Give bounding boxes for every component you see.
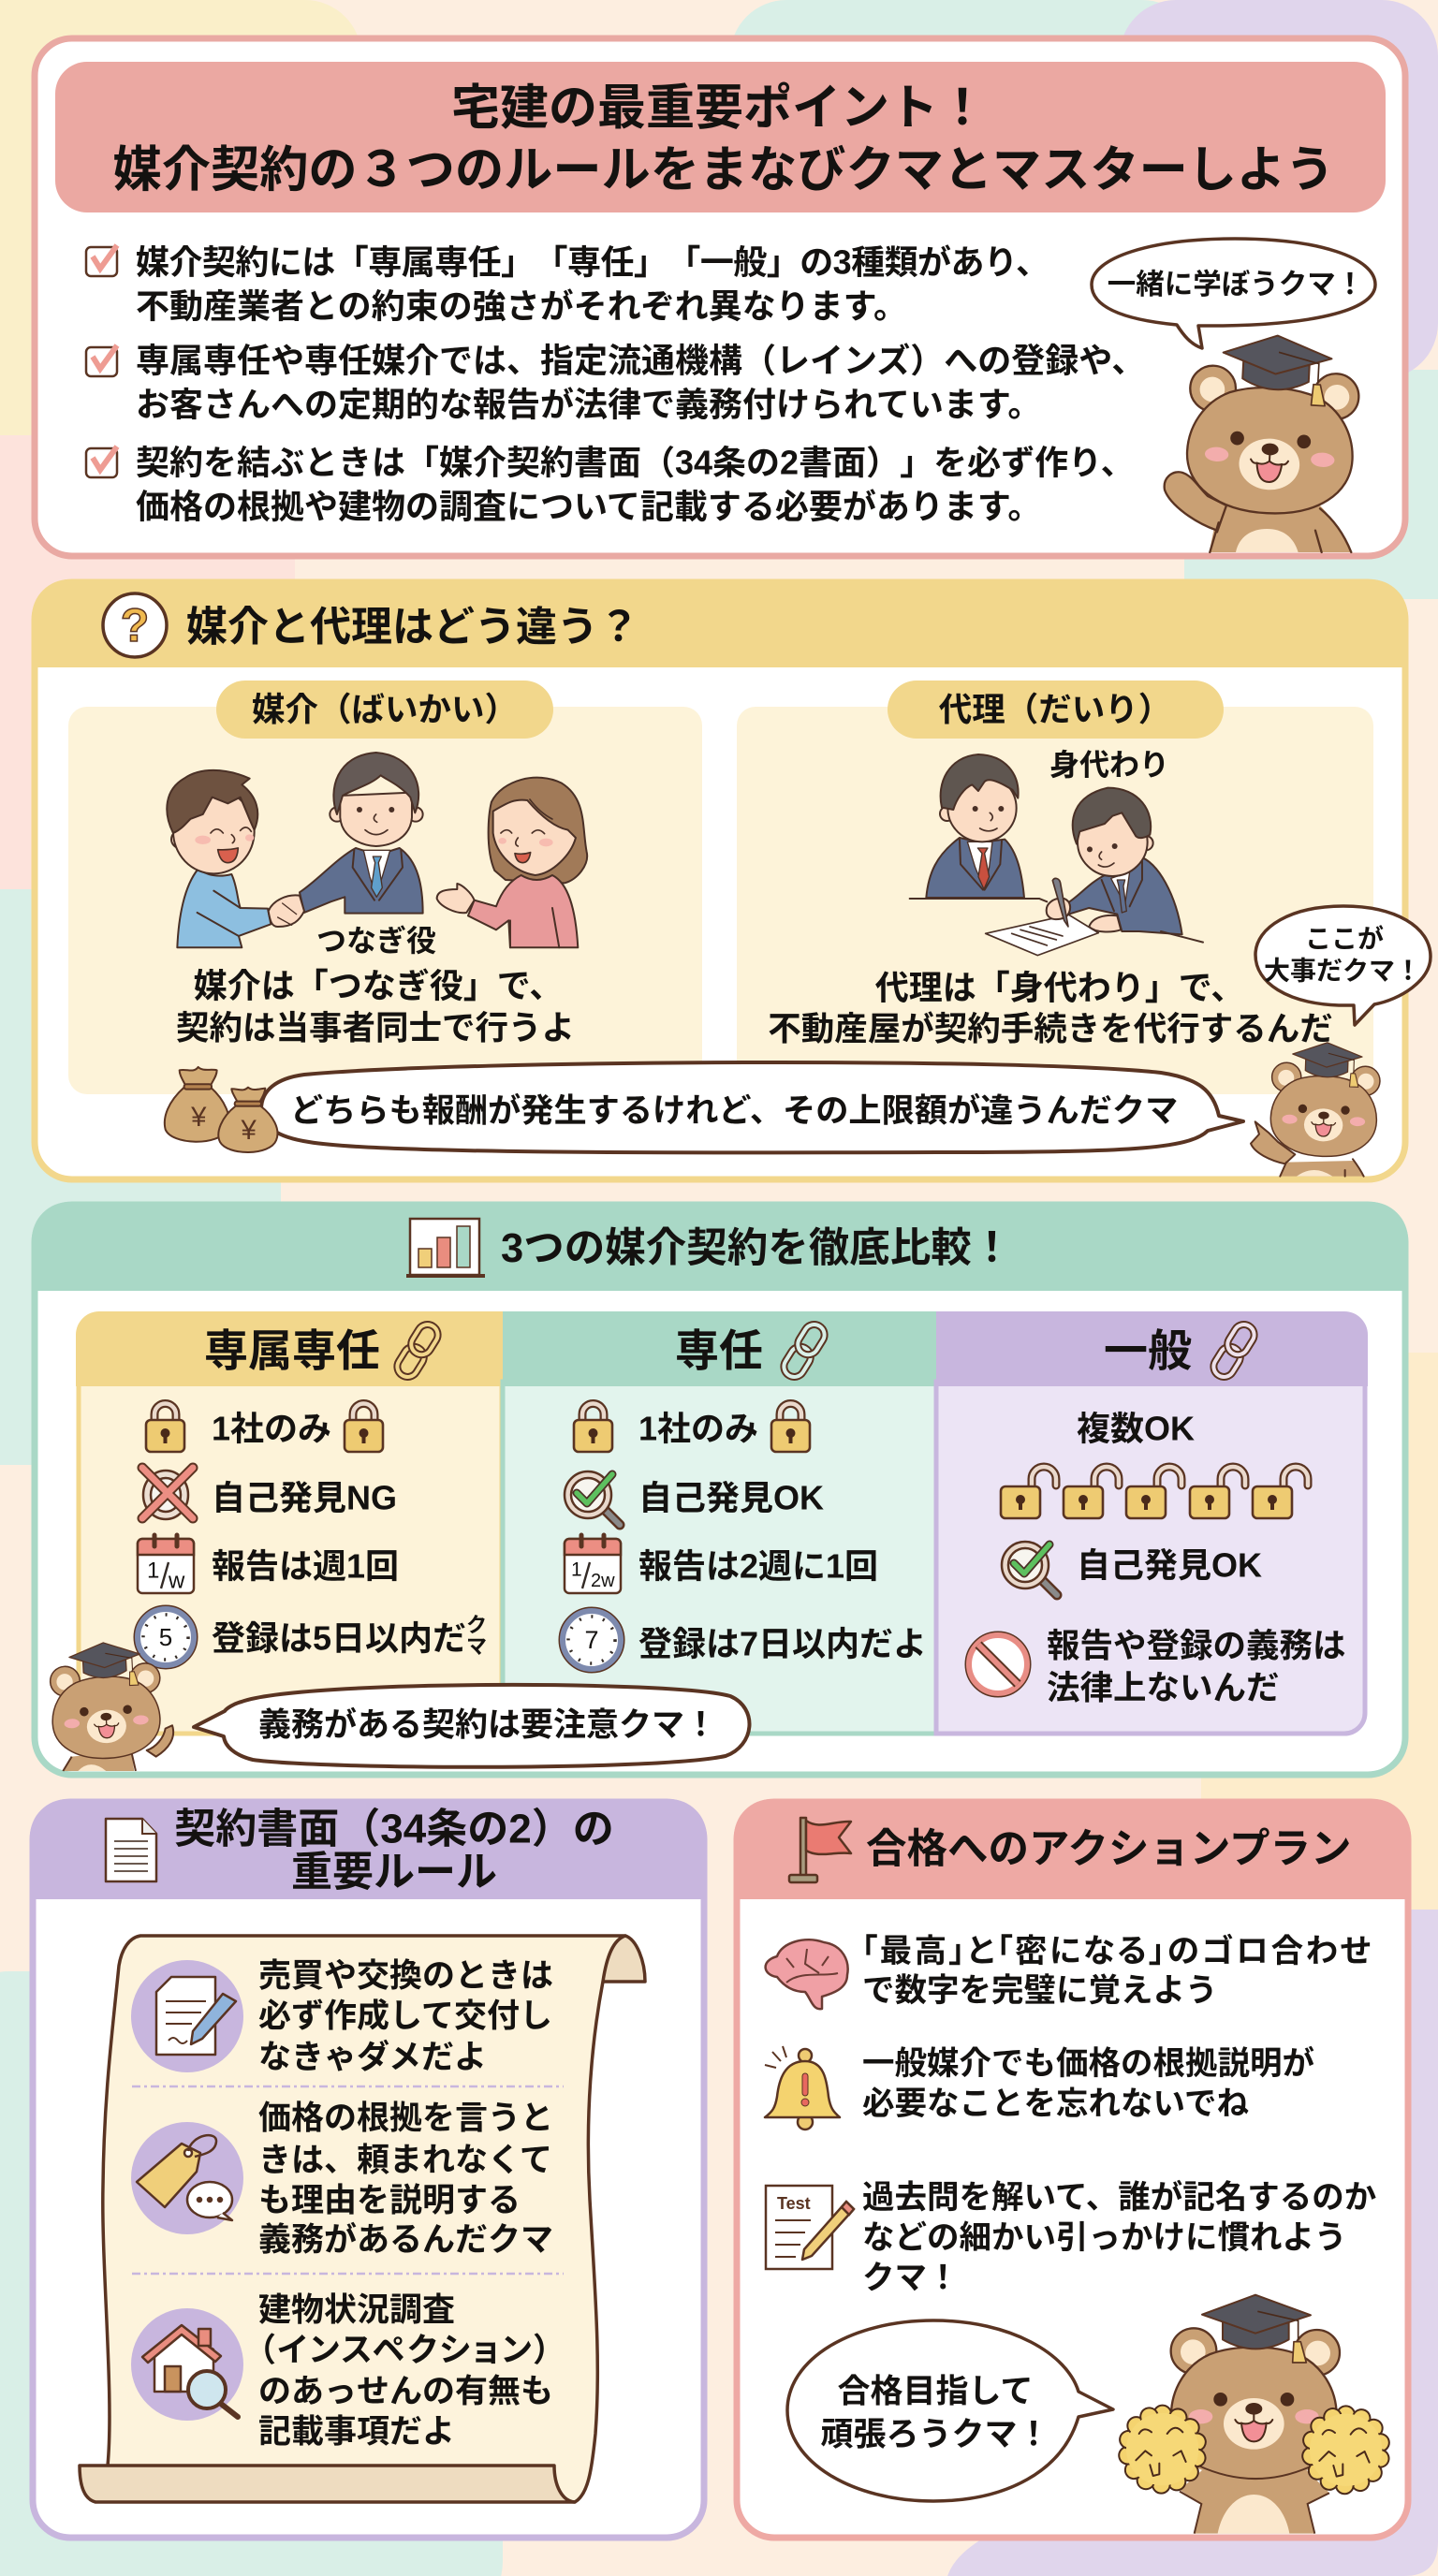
icon: money bags: ¥ [190, 1102, 207, 1133]
column: exclusive-exclusive: 専属専任 [204, 1325, 380, 1376]
panel header [734, 1799, 1411, 1899]
rule 3: 記載事項だよ [258, 2413, 455, 2451]
action 2: 必要なことを忘れないでね [862, 2086, 1249, 2122]
row: no obligation: 法律上ないんだ [1047, 1669, 1280, 1706]
row: register within 7 days [563, 1611, 927, 1669]
icon: chain [780, 1321, 829, 1381]
rule 2 [131, 2100, 553, 2258]
panel: action plan [734, 1799, 1411, 2538]
pill: agency [888, 681, 1224, 739]
action 2: 一般媒介でも価格の根拠説明が [862, 2045, 1314, 2082]
action 3: 過去問を解いて、誰が記名するのか [862, 2179, 1376, 2216]
bullet 1 [86, 243, 1049, 326]
bullet 1: 不動産業者との約束の強さがそれぞれ異なります。 [136, 286, 907, 326]
icon: chain [393, 1321, 442, 1381]
speech bubble: aim to pass: 合格目指して [838, 2374, 1033, 2409]
row: register within 5 days [138, 1609, 487, 1665]
bullet 1: 媒介契約には「専属専任」「専任」「一般」の3種類があり、 [136, 243, 1049, 281]
column: exclusive-exclusive [76, 1311, 503, 1734]
speech bubble: reward limits: どちらも報酬が発生するけれど、その上限額が違うんだクマ [290, 1093, 1178, 1129]
action 2 [765, 2045, 1314, 2130]
icon: document and pen [156, 1977, 236, 2055]
row: weekly report: 1 [147, 1558, 159, 1584]
panel: summary [35, 38, 1405, 556]
row: one company only: 1社のみ [212, 1410, 331, 1447]
row: self discovery OK [1002, 1542, 1262, 1595]
illustration: parchment scroll [80, 1936, 645, 2502]
icon: question mark [103, 593, 167, 657]
icon: brain [766, 1939, 848, 2009]
panel: contract document rules [30, 1799, 707, 2538]
column: exclusive: 専任 [675, 1325, 763, 1376]
rule 3: 建物状況調査 [258, 2291, 455, 2329]
row: register within 5 days: 登録は5日以内だ [212, 1619, 466, 1657]
text: multiple OK: 複数OK [1077, 1410, 1195, 1447]
row: one company only: 1社のみ [638, 1410, 758, 1447]
action 1: で数字を完璧に覚えよう [862, 1973, 1217, 2009]
pill: brokerage [216, 681, 553, 739]
title banner: 宅建の最重要ポイント！ [451, 81, 987, 136]
text: brokerage explanation [176, 966, 575, 1046]
text: brokerage explanation: 媒介は「つなぎ役」で、 [194, 966, 563, 1005]
action 1: 「最高」と「密になる」のゴロ合わせ [861, 1933, 1371, 1969]
action 3: などの細かい引っかけに慣れよう [862, 2220, 1346, 2256]
speech bubble: aim to pass [787, 2320, 1113, 2501]
speech bubble: this is important: 大事だクマ！ [1264, 957, 1421, 985]
speech bubble: be careful: 義務がある契約は要注意クマ！ [258, 1707, 717, 1743]
row: one company only [146, 1404, 383, 1452]
row: weekly report: 報告は週1回 [212, 1546, 399, 1586]
panel: comparison of the three contracts [32, 1202, 1408, 1775]
label: stand-in: 身代わり [1049, 748, 1169, 782]
row: register within 5 days: 5 [159, 1623, 172, 1651]
row: no obligation: 報告や登録の義務は [1047, 1627, 1346, 1664]
speech bubble: be careful [194, 1685, 749, 1767]
bullet 3: 契約を結ぶときは「媒介契約書面（34条の2書面）」を必ず作り、 [136, 444, 1135, 481]
row: report every two weeks [565, 1535, 878, 1593]
text: agency explanation: 不動産屋が契約手続きを代行するんだ [768, 1010, 1333, 1047]
row: self discovery NG: 自己発見NG [212, 1479, 397, 1516]
rule 1: 必ず作成して交付し [258, 1998, 552, 2035]
rule 2: 義務があるんだクマ [258, 2222, 553, 2258]
rule 3 [131, 2291, 553, 2451]
speech bubble: study together: 一緒に学ぼうクマ！ [1108, 269, 1364, 300]
bullet 3 [86, 444, 1135, 526]
row: report every two weeks: 報告は2週に1回 [638, 1546, 878, 1586]
rule 3: のあっせんの有無も [258, 2374, 553, 2409]
speech bubble: study together [1092, 239, 1375, 348]
title banner [55, 62, 1386, 212]
action 3 [766, 2179, 1376, 2296]
action 3: クマ！ [862, 2261, 959, 2296]
bullet 2: お客さんへの定期的な報告が法律で義務付けられています。 [136, 386, 1041, 423]
bear: waving with graduation cap [1165, 331, 1362, 552]
pill: brokerage: 媒介（ばいかい） [252, 691, 518, 728]
bear: cheering with pompoms [1118, 2295, 1391, 2534]
icon: price tag and speech [137, 2135, 232, 2220]
row: register within 7 days: 7 [584, 1626, 599, 1654]
action 1 [766, 1933, 1371, 2009]
rule 2: きは、頼まれなくて [258, 2142, 552, 2179]
text: agency explanation [768, 968, 1333, 1047]
rule 3: （インスペクション） [258, 2333, 550, 2368]
icon: chain [1210, 1321, 1258, 1381]
panel header: 重要ルール [291, 1850, 497, 1895]
row: self discovery OK: 自己発見OK [1077, 1546, 1262, 1584]
row: report every two weeks: 2w [591, 1571, 615, 1591]
panel header: 媒介と代理はどう違う？ [186, 605, 639, 650]
bear: small pointing [49, 1640, 173, 1771]
row: weekly report [138, 1535, 399, 1593]
row: report every two weeks: 1 [571, 1559, 582, 1580]
row: self discovery OK: 自己発見OK [638, 1479, 824, 1516]
rule 1 [131, 1958, 553, 2076]
panel header [32, 579, 1408, 667]
bullet 2 [86, 341, 1145, 423]
illustration: three people shaking hands [167, 753, 587, 947]
panel header: 契約書面（34条の2）の [174, 1807, 614, 1852]
pill: agency: 代理（だいり） [939, 691, 1171, 728]
icon: document [106, 1819, 156, 1881]
speech bubble: this is important [1255, 906, 1431, 1025]
panel header [32, 1202, 1408, 1291]
row: weekly report: w [168, 1569, 185, 1593]
sub-panel: brokerage [68, 681, 702, 1094]
panel header [30, 1799, 707, 1899]
row: self discovery OK [565, 1471, 824, 1525]
icon: house and magnifier [142, 2325, 238, 2417]
column: general: 一般 [1104, 1325, 1192, 1376]
title banner: 媒介契約の３つのルールをまなびクマとマスターしよう [113, 143, 1334, 198]
row: register within 7 days: 登録は7日以内だよ [638, 1625, 927, 1662]
row: register within 5 days: ク [466, 1614, 487, 1636]
icon: five open locks [1001, 1467, 1308, 1518]
row: self discovery NG [142, 1468, 397, 1519]
text: brokerage explanation: 契約は当事者同士で行うよ [176, 1009, 575, 1046]
icon: alert bell [765, 2046, 840, 2130]
row: register within 5 days: マ [466, 1634, 487, 1659]
panel header: 合格へのアクションプラン [866, 1827, 1352, 1872]
text: agency explanation: 代理は「身代わり」で、 [875, 968, 1244, 1007]
icon: test sheet and pencil: Test [777, 2194, 811, 2213]
rule 2: 価格の根拠を言うと [258, 2100, 553, 2136]
panel header: 3つの媒介契約を徹底比較！ [501, 1226, 1012, 1271]
icon: test sheet and pencil [766, 2186, 854, 2269]
rule 2: も理由を説明する [258, 2183, 521, 2218]
bear: pointing up [1251, 1041, 1381, 1177]
panel: brokerage vs agency [32, 579, 1431, 1179]
icon: bar chart [406, 1219, 485, 1276]
bullet 3: 価格の根拠や建物の調査について記載する必要があります。 [136, 487, 1041, 526]
sub-panel: agency [737, 681, 1373, 1094]
illustration: agent signing a contract [910, 754, 1203, 956]
icon: money bags: ¥ [240, 1115, 257, 1146]
column: general [936, 1311, 1368, 1734]
rule 1: 売買や交換のときは [258, 1958, 553, 1994]
speech bubble: reward limits [261, 1062, 1243, 1152]
row: one company only [574, 1404, 810, 1452]
row: no obligation [969, 1627, 1346, 1706]
bullet 2: 専属専任や専任媒介では、指定流通機構（レインズ）への登録や、 [136, 341, 1145, 380]
icon: money bags [165, 1067, 277, 1152]
rule 1: なきゃダメだよ [258, 2039, 487, 2076]
label: connector: つなぎ役 [316, 924, 436, 958]
column: exclusive [503, 1311, 936, 1734]
icon: question mark: ? [121, 599, 149, 651]
speech bubble: aim to pass: 頑張ろうクマ！ [820, 2417, 1050, 2452]
icon: flag [789, 1818, 851, 1882]
speech bubble: this is important: ここが [1305, 923, 1384, 953]
